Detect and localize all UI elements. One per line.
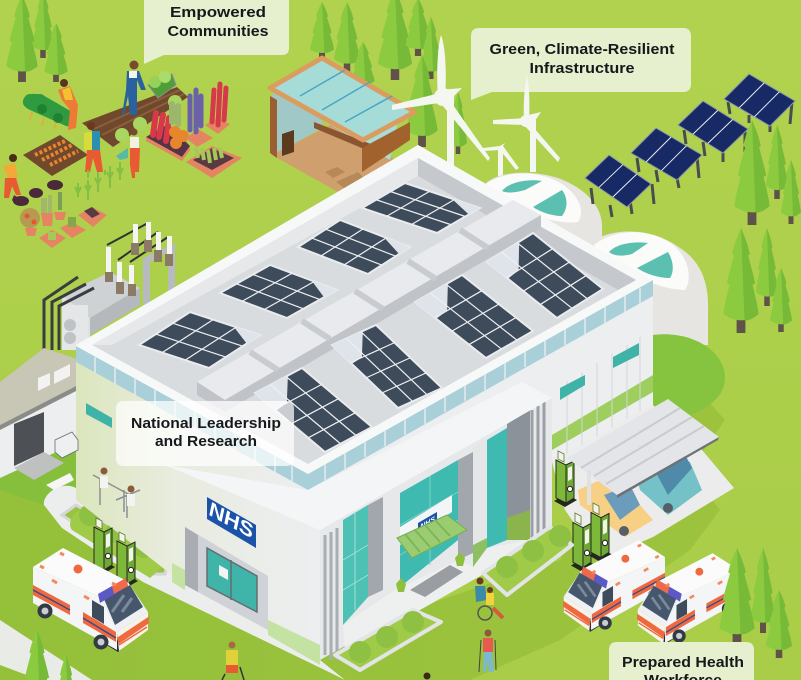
lawn by service building	[0, 436, 100, 520]
biogas tank two	[592, 231, 708, 345]
AC unit	[55, 432, 78, 458]
NHS logo: NHS	[209, 496, 253, 544]
outdoor table and people	[93, 468, 140, 518]
front block entrance facade	[320, 398, 552, 660]
callout: Green, Climate-Resilient Infrastructure: Green, Climate-Resilient	[490, 41, 675, 58]
sprouts	[75, 162, 123, 200]
ambulances right	[564, 540, 739, 645]
trees on the right	[723, 120, 801, 333]
NHS entrance sign	[400, 495, 452, 545]
planters in front of entrance	[335, 525, 572, 670]
gardener digging	[3, 154, 28, 206]
hedge bed	[23, 94, 76, 129]
flower soil plot	[23, 135, 88, 176]
right wall green band and windows	[552, 337, 653, 455]
rooftop solar panels	[139, 183, 603, 452]
potted plants and small beds	[13, 180, 107, 248]
large bush	[653, 334, 725, 420]
green entrance awning	[397, 515, 467, 558]
trees behind top centre	[310, 0, 467, 154]
shaded ground and driveway	[0, 380, 725, 680]
glass pavilion	[270, 58, 415, 192]
cabbage cart	[148, 71, 176, 98]
callout: Empowered Communities	[144, 0, 289, 64]
canopy	[567, 399, 719, 505]
pavement and planter along left wall	[44, 486, 345, 680]
field solar arrays	[585, 74, 795, 217]
roof	[76, 145, 653, 490]
trees behind top left	[6, 0, 68, 82]
entrance plaza	[343, 540, 530, 652]
wind turbines	[392, 35, 560, 176]
EV chargers at wall	[554, 451, 612, 572]
callout: Prepared Health Workforce	[609, 642, 754, 680]
raised beds with crops	[146, 84, 242, 178]
callout: Empowered Communities: Communities	[168, 23, 268, 40]
gardener in orange tending hedge	[58, 79, 78, 130]
main building left wall	[76, 345, 320, 665]
farmer in blue overalls	[122, 60, 146, 115]
biogas tank one	[480, 173, 602, 280]
callout: Prepared Health Workforce: Prepared Health	[622, 654, 744, 671]
footpath bottom left	[0, 620, 92, 680]
vegetable soil plot	[82, 87, 188, 147]
callout: Green, Climate-Resilient Infrastructure: Infrastructure	[530, 60, 634, 77]
trees bottom left	[22, 630, 78, 680]
left wall details	[86, 403, 320, 665]
portico top	[165, 382, 552, 530]
main building right wall	[308, 280, 653, 600]
electrical transformer	[44, 222, 175, 350]
child with watering can	[116, 128, 140, 178]
NHS entrance sign: NHS	[420, 514, 435, 531]
blue car	[633, 445, 702, 515]
callout: National Leadership and Research	[116, 401, 294, 466]
service building	[0, 348, 80, 490]
ambulance left	[33, 548, 148, 652]
callout: Green, Climate-Resilient Infrastructure	[471, 28, 691, 100]
roof ventilation duct	[197, 200, 541, 412]
callout: National Leadership and Research: National Leadership	[131, 415, 281, 432]
EV chargers left	[92, 518, 138, 588]
yellow car	[578, 480, 653, 537]
callout: Empowered Communities: Empowered	[170, 4, 266, 21]
people near entrance	[222, 578, 503, 680]
trees bottom right	[719, 548, 792, 658]
parking pad	[552, 400, 734, 560]
callout: National Leadership and Research: and Research	[155, 433, 257, 450]
entrance mat	[410, 565, 463, 597]
gardener with backpack	[84, 122, 103, 172]
